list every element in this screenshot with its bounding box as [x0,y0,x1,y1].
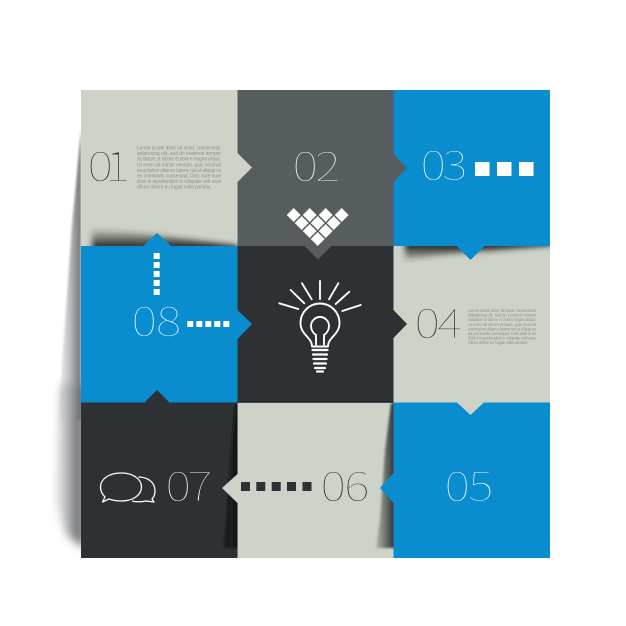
text block 01: exercitation ullamco laboris nisi ut aliquip ex [137,168,221,174]
panel 03 tile [394,90,550,246]
arrow: 08 to center [238,310,252,339]
text block 04 [468,308,537,345]
text block 04: exercitation ullamco laboris nisi ut aliquip ex [468,326,537,331]
text block 04: Lorem ipsum dolor sit amet, consectetur [468,308,537,313]
text block 04: dolor in reprehenderit in voluptate velit esse [468,336,537,341]
number 07: 07 [166,454,212,513]
shadow: on panel 07 right [224,402,238,549]
panel 01 tile [81,90,238,246]
arrow: 03 to 04 [456,246,484,260]
number 05: 05 [444,454,493,513]
text block 01: cillum dolore eu fugiat nulla pariatur. [137,185,212,191]
panel 06 tile [238,402,394,558]
center panel tile [238,246,394,402]
number 02: 02 [292,134,340,193]
icon: diamond heart [286,208,349,246]
panel 08 tile [81,246,238,402]
arrow: center to 04 [394,310,407,338]
text block 04: incididunt ut labore et dolore magna aliqua. [468,317,536,322]
shadow: on panel 06 right [376,402,394,550]
text block 04: adipisicing elit, sed do eiusmod tempor [468,313,537,318]
number 04: 04 [414,291,462,350]
text block 01: incididunt ut labore et dolore magna aliqua. [137,157,221,163]
squares: panel 08 vertical [154,253,160,295]
shadow: on panel 04 top [400,246,550,262]
arrow: 02 to center [304,246,332,260]
arrow: 07 to 08 [144,390,170,403]
number 01: 01 [88,134,130,193]
arrow: 04 to 05 [457,402,484,415]
squares: panel 03 [475,162,534,176]
arrow: 06 to 07 [222,474,238,503]
shadow: left edge of sheet [56,130,84,548]
text block 04: Ut enim ad minim veniam, quis nostrud [468,322,537,327]
icon: light bulb [279,281,361,372]
arrow: 01 to 02 [238,153,252,182]
squares: panel 06 [241,482,312,491]
number 08: 08 [132,289,181,348]
squares: panel 08 horizontal [187,321,229,327]
text block 01: adipisicing elit, sed do eiusmod tempor [137,151,221,157]
panel 05 tile [394,402,550,558]
shadow: on panel 01 bottom [88,228,238,246]
text block 01 [137,146,221,191]
number 06: 06 [320,454,369,513]
text block 04: cillum dolore eu fugiat nulla pariatur. [468,340,528,345]
text block 01: dolor in reprehenderit in voluptate velit esse [137,179,221,185]
arrow: 02 to 03 [394,154,407,182]
icon: speech bubbles [100,473,155,502]
text block 04: ea commodo consequat. Duis aute irure [468,331,537,336]
text block 01: ea commodo consequat. Duis aute irure [137,174,221,180]
text block 01: Lorem ipsum dolor sit amet, consectetur [137,146,221,152]
panel 04 tile [394,246,550,402]
text block 01: Ut enim ad minim veniam, quis nostrud [137,162,221,168]
panel 02 tile [238,90,394,246]
divider edge under center panel [238,402,394,403]
panel 07 tile [81,402,238,558]
arrow: 08 to 01 [143,233,171,246]
arrow: 05 to 06 [380,473,394,503]
number 03: 03 [420,133,467,192]
